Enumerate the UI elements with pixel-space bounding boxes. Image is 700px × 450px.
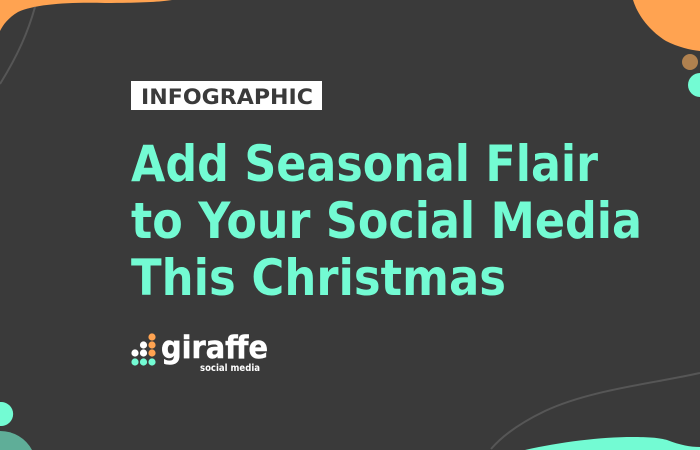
icon: mint dot <box>688 73 700 97</box>
tagline: social media <box>200 363 260 374</box>
icon: logo dots <box>131 333 156 366</box>
title <box>131 135 642 307</box>
icon: mint dot bottom-left <box>0 402 13 426</box>
icon: faded orange dot <box>682 54 698 70</box>
shape: muted teal semicircle <box>0 431 32 450</box>
shape: bottom-right mint wave <box>525 437 700 450</box>
shape: top-left orange wave <box>0 0 172 31</box>
logo: giraffe social media <box>131 330 268 374</box>
title: Add Seasonal Flair <box>131 135 598 193</box>
line: top-left curve <box>0 7 35 84</box>
badge: INFOGRAPHIC: INFOGRAPHIC <box>141 85 313 109</box>
wordmark: giraffe <box>161 330 268 366</box>
title: This Christmas <box>131 249 506 307</box>
shape: top-right orange blob <box>633 0 700 51</box>
line: lower-right arc <box>491 373 700 449</box>
title: to Your Social Media <box>131 192 642 250</box>
